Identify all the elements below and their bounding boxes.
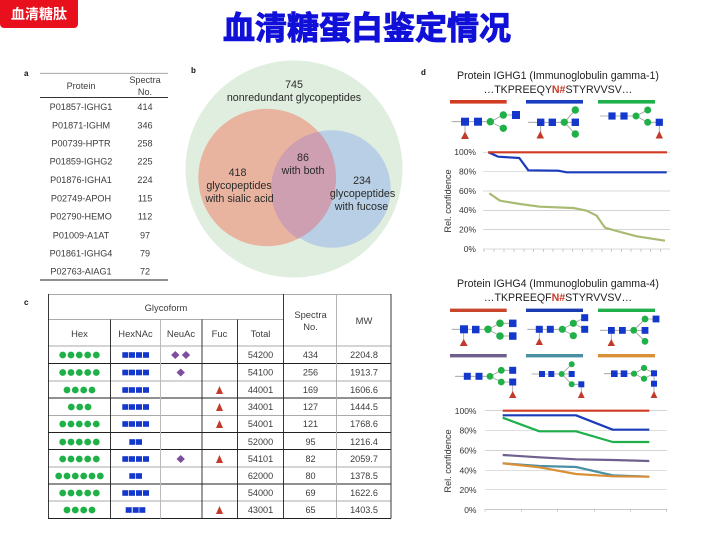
row 2 bbox=[59, 368, 378, 378]
panel a: protein table: P01857-IGHG1 bbox=[50, 102, 112, 112]
row 6 bbox=[59, 437, 378, 447]
panel a: protein table: 414 bbox=[137, 102, 153, 112]
panel a: protein table: No. bbox=[138, 87, 152, 97]
line chart IGHG1: 0% bbox=[464, 244, 476, 254]
row 2: 1913.7 bbox=[350, 368, 378, 378]
line chart IGHG4: 80% bbox=[459, 426, 477, 436]
IGHG1 heading bbox=[457, 70, 659, 96]
row 5 bbox=[59, 419, 378, 429]
panel c: glycoform table: Total bbox=[251, 328, 270, 339]
panel a: protein table: P01009-A1AT bbox=[53, 230, 110, 240]
panel a: protein table: 112 bbox=[138, 212, 152, 222]
line chart IGHG1 bbox=[443, 147, 670, 254]
row 2: 256 bbox=[303, 368, 318, 378]
glycan 2 bbox=[528, 106, 579, 138]
panel b: venn diagram: 418 bbox=[229, 167, 246, 179]
glycan D bbox=[455, 367, 516, 398]
panel b: venn diagram: 745 bbox=[285, 79, 303, 91]
line chart IGHG4: 0% bbox=[464, 505, 477, 515]
panel letter b: b bbox=[191, 66, 196, 75]
panel a: protein table: P00739-HPTR bbox=[51, 138, 111, 148]
badge: 血清糖肽: 血清糖肽 bbox=[11, 6, 67, 22]
panel d: IGHG1 bbox=[421, 68, 670, 254]
IGHG1 heading: …TKPREEQYN#STYRVVSV… bbox=[484, 84, 632, 96]
row 4: 1444.5 bbox=[350, 402, 378, 412]
legend bars IGHG1 bbox=[450, 100, 655, 104]
row 7 bbox=[59, 454, 378, 464]
line chart IGHG1: 60% bbox=[459, 186, 476, 196]
line chart IGHG4: 60% bbox=[459, 446, 477, 456]
panel a: protein table: 224 bbox=[137, 175, 153, 185]
row 9: 69 bbox=[305, 488, 316, 498]
row 1: 54200 bbox=[248, 350, 273, 360]
row 1: 434 bbox=[303, 350, 318, 360]
glycan A bbox=[452, 320, 516, 346]
line chart IGHG4: 40% bbox=[459, 466, 477, 476]
line chart IGHG4 bbox=[443, 406, 667, 515]
row 1 bbox=[59, 350, 378, 360]
row 4: 34001 bbox=[248, 402, 273, 412]
panel a: protein table: 258 bbox=[137, 138, 153, 148]
panel a: protein table: P02749-APOH bbox=[51, 194, 111, 204]
panel a: protein table: 79 bbox=[140, 248, 150, 258]
row 10: 43001 bbox=[248, 505, 273, 515]
row 2: 54100 bbox=[248, 368, 273, 378]
panel c: glycoform table: Hex bbox=[71, 328, 88, 339]
row 1: 2204.8 bbox=[350, 350, 378, 360]
panel c: glycoform table: Spectra bbox=[294, 309, 327, 320]
panel b: venn diagram: with sialic acid bbox=[204, 193, 274, 205]
panel a: protein table bbox=[24, 69, 168, 280]
panel b: venn diagram: nonredundant glycopeptides bbox=[227, 92, 361, 104]
panel d: IGHG4 bbox=[443, 278, 667, 515]
panel a: protein table: Spectra bbox=[129, 75, 162, 85]
panel b: venn diagram: 86 bbox=[297, 152, 309, 164]
line chart IGHG4: 100% bbox=[455, 406, 477, 416]
line chart IGHG1: 100% bbox=[454, 147, 476, 157]
row 7: 82 bbox=[305, 454, 316, 464]
row 8: 80 bbox=[305, 471, 316, 481]
row 4 bbox=[68, 402, 378, 412]
panel a: protein table: P02790-HEMO bbox=[50, 212, 112, 222]
IGHG4 heading: …TKPREEQFN#STYRVVSV… bbox=[484, 292, 632, 304]
row 9: 1622.6 bbox=[350, 488, 378, 498]
row 3: 44001 bbox=[248, 385, 273, 395]
row 7: 54101 bbox=[248, 454, 273, 464]
badge: 血清糖肽 bbox=[0, 0, 78, 28]
line chart IGHG4: 20% bbox=[459, 485, 477, 495]
panel a: protein table: 97 bbox=[140, 230, 150, 240]
IGHG4 heading: Protein IGHG4 (Immunoglobulin gamma-4) bbox=[457, 278, 659, 290]
panel letter a: a bbox=[24, 69, 29, 78]
line chart IGHG4: Rel. confidence bbox=[443, 429, 453, 493]
glycan F bbox=[604, 365, 657, 398]
glycan 1 bbox=[452, 111, 520, 139]
panel a: protein table: P01876-IGHA1 bbox=[50, 175, 112, 185]
panel b: venn diagram: 234 bbox=[353, 175, 371, 187]
row 9: 54000 bbox=[248, 488, 273, 498]
row 10: 65 bbox=[305, 505, 316, 515]
row 3 bbox=[64, 385, 378, 395]
glycan C bbox=[600, 316, 659, 346]
row 6: 1216.4 bbox=[350, 437, 378, 447]
IGHG4 heading bbox=[457, 278, 659, 304]
line chart IGHG1: 20% bbox=[459, 224, 476, 234]
row 5: 54001 bbox=[248, 419, 273, 429]
row 6: 52000 bbox=[248, 437, 273, 447]
row 4: 127 bbox=[303, 402, 318, 412]
panel a: protein table: P01861-IGHG4 bbox=[50, 248, 112, 258]
panel a: protein table: 225 bbox=[137, 156, 153, 166]
glycan E bbox=[532, 361, 585, 398]
panel c: glycoform table: Fuc bbox=[212, 328, 228, 339]
line chart IGHG1: 40% bbox=[459, 205, 476, 215]
row 6: 95 bbox=[305, 437, 316, 447]
panel letter d: d bbox=[421, 68, 426, 77]
row 10 bbox=[64, 505, 378, 515]
panel a: protein table: 346 bbox=[137, 120, 153, 130]
line chart IGHG1: 80% bbox=[459, 166, 476, 176]
row 10: 1403.5 bbox=[350, 505, 378, 515]
panel c: glycoform table: MW bbox=[356, 315, 372, 326]
legend bars IGHG4 bbox=[450, 309, 655, 357]
row 8 bbox=[55, 471, 378, 481]
panel b: venn diagram: with fucose bbox=[334, 201, 388, 213]
row 5: 1768.6 bbox=[350, 419, 378, 429]
panel letter c: c bbox=[24, 298, 29, 307]
panel b: venn diagram bbox=[186, 60, 402, 278]
title: 血清糖蛋白鉴定情况 bbox=[223, 10, 511, 46]
row 8: 62000 bbox=[248, 471, 273, 481]
row 3: 169 bbox=[303, 385, 318, 395]
panel b: venn diagram: with both bbox=[281, 165, 324, 177]
row 3: 1606.6 bbox=[350, 385, 378, 395]
panel b: venn diagram: glycopeptides bbox=[206, 180, 272, 192]
glycan B bbox=[527, 314, 588, 345]
panel a: protein table: 72 bbox=[140, 266, 150, 276]
panel c: glycoform table: HexNAc bbox=[118, 328, 153, 339]
panel c: glycoform table: NeuAc bbox=[167, 328, 195, 339]
panel b: venn diagram: glycopeptides bbox=[330, 188, 395, 200]
row 8: 1378.5 bbox=[350, 471, 378, 481]
panel a: protein table: P02763-AIAG1 bbox=[50, 266, 112, 276]
panel a: protein table: 115 bbox=[138, 194, 152, 204]
panel c: glycoform table bbox=[24, 294, 391, 518]
glycan 3 bbox=[600, 106, 663, 138]
panel c: glycoform table: Glycoform bbox=[145, 302, 188, 313]
panel a: protein table: Protein bbox=[67, 81, 95, 91]
panel a: protein table: P01859-IGHG2 bbox=[50, 156, 112, 166]
panel a: protein table: P01871-IGHM bbox=[52, 120, 110, 130]
IGHG1 heading: Protein IGHG1 (Immunoglobulin gamma-1) bbox=[457, 70, 659, 82]
line chart IGHG1: Rel. confidence bbox=[443, 169, 453, 233]
row 7: 2059.7 bbox=[350, 454, 378, 464]
row 5: 121 bbox=[303, 419, 318, 429]
panel c: glycoform table: No. bbox=[303, 321, 318, 332]
row 9 bbox=[59, 488, 378, 498]
